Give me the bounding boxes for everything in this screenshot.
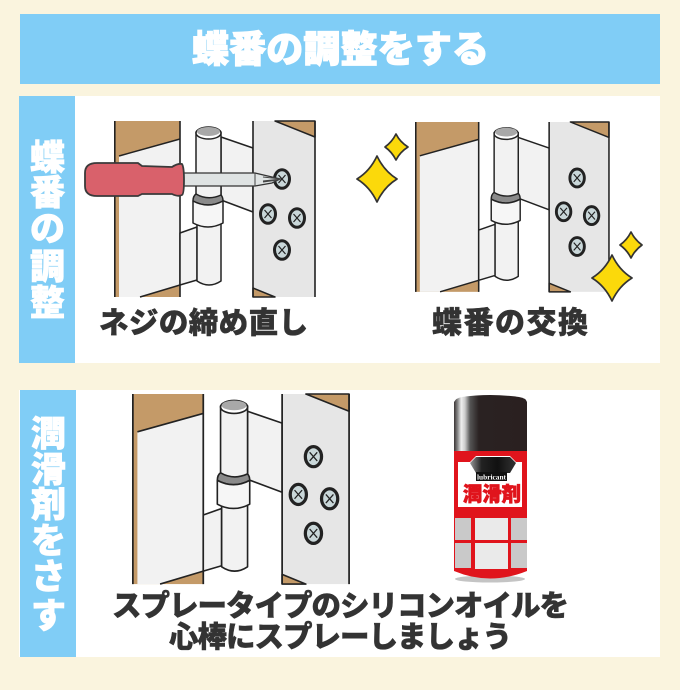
caption: spray silicone oil: 心棒にスプレーしましょう (169, 621, 512, 654)
panel: hinge adjustment (19, 96, 660, 363)
illustration: hinge replacement (357, 122, 642, 301)
icon: screwdriver (85, 163, 281, 196)
title bar (20, 14, 660, 84)
title bar: 蝶番の調整をする (192, 29, 489, 70)
icon: sparkles (357, 134, 642, 301)
side label: hinge adjustment (19, 96, 75, 363)
illustration: hinge (132, 394, 349, 584)
side label: hinge adjustment: 蝶番の調整 (30, 139, 65, 323)
can panels (455, 518, 527, 569)
can label: lubricant (477, 472, 506, 482)
illustration: tightening screws (85, 121, 315, 297)
panel: lubricant (19, 390, 660, 657)
caption: spray silicone oil: スプレータイプのシリコンオイルを (112, 590, 569, 623)
can label: 潤滑剤 (463, 483, 521, 506)
caption: hinge replacement: 蝶番の交換 (432, 307, 588, 340)
illustration: lubricant spray can (454, 395, 527, 582)
caption: tightening screws: ネジの締め直し (99, 307, 308, 340)
can label (458, 456, 522, 507)
side label: lubricant (20, 390, 76, 657)
side label: lubricant: 潤滑剤をさす (31, 415, 66, 636)
caption: spray silicone oil (112, 590, 569, 654)
